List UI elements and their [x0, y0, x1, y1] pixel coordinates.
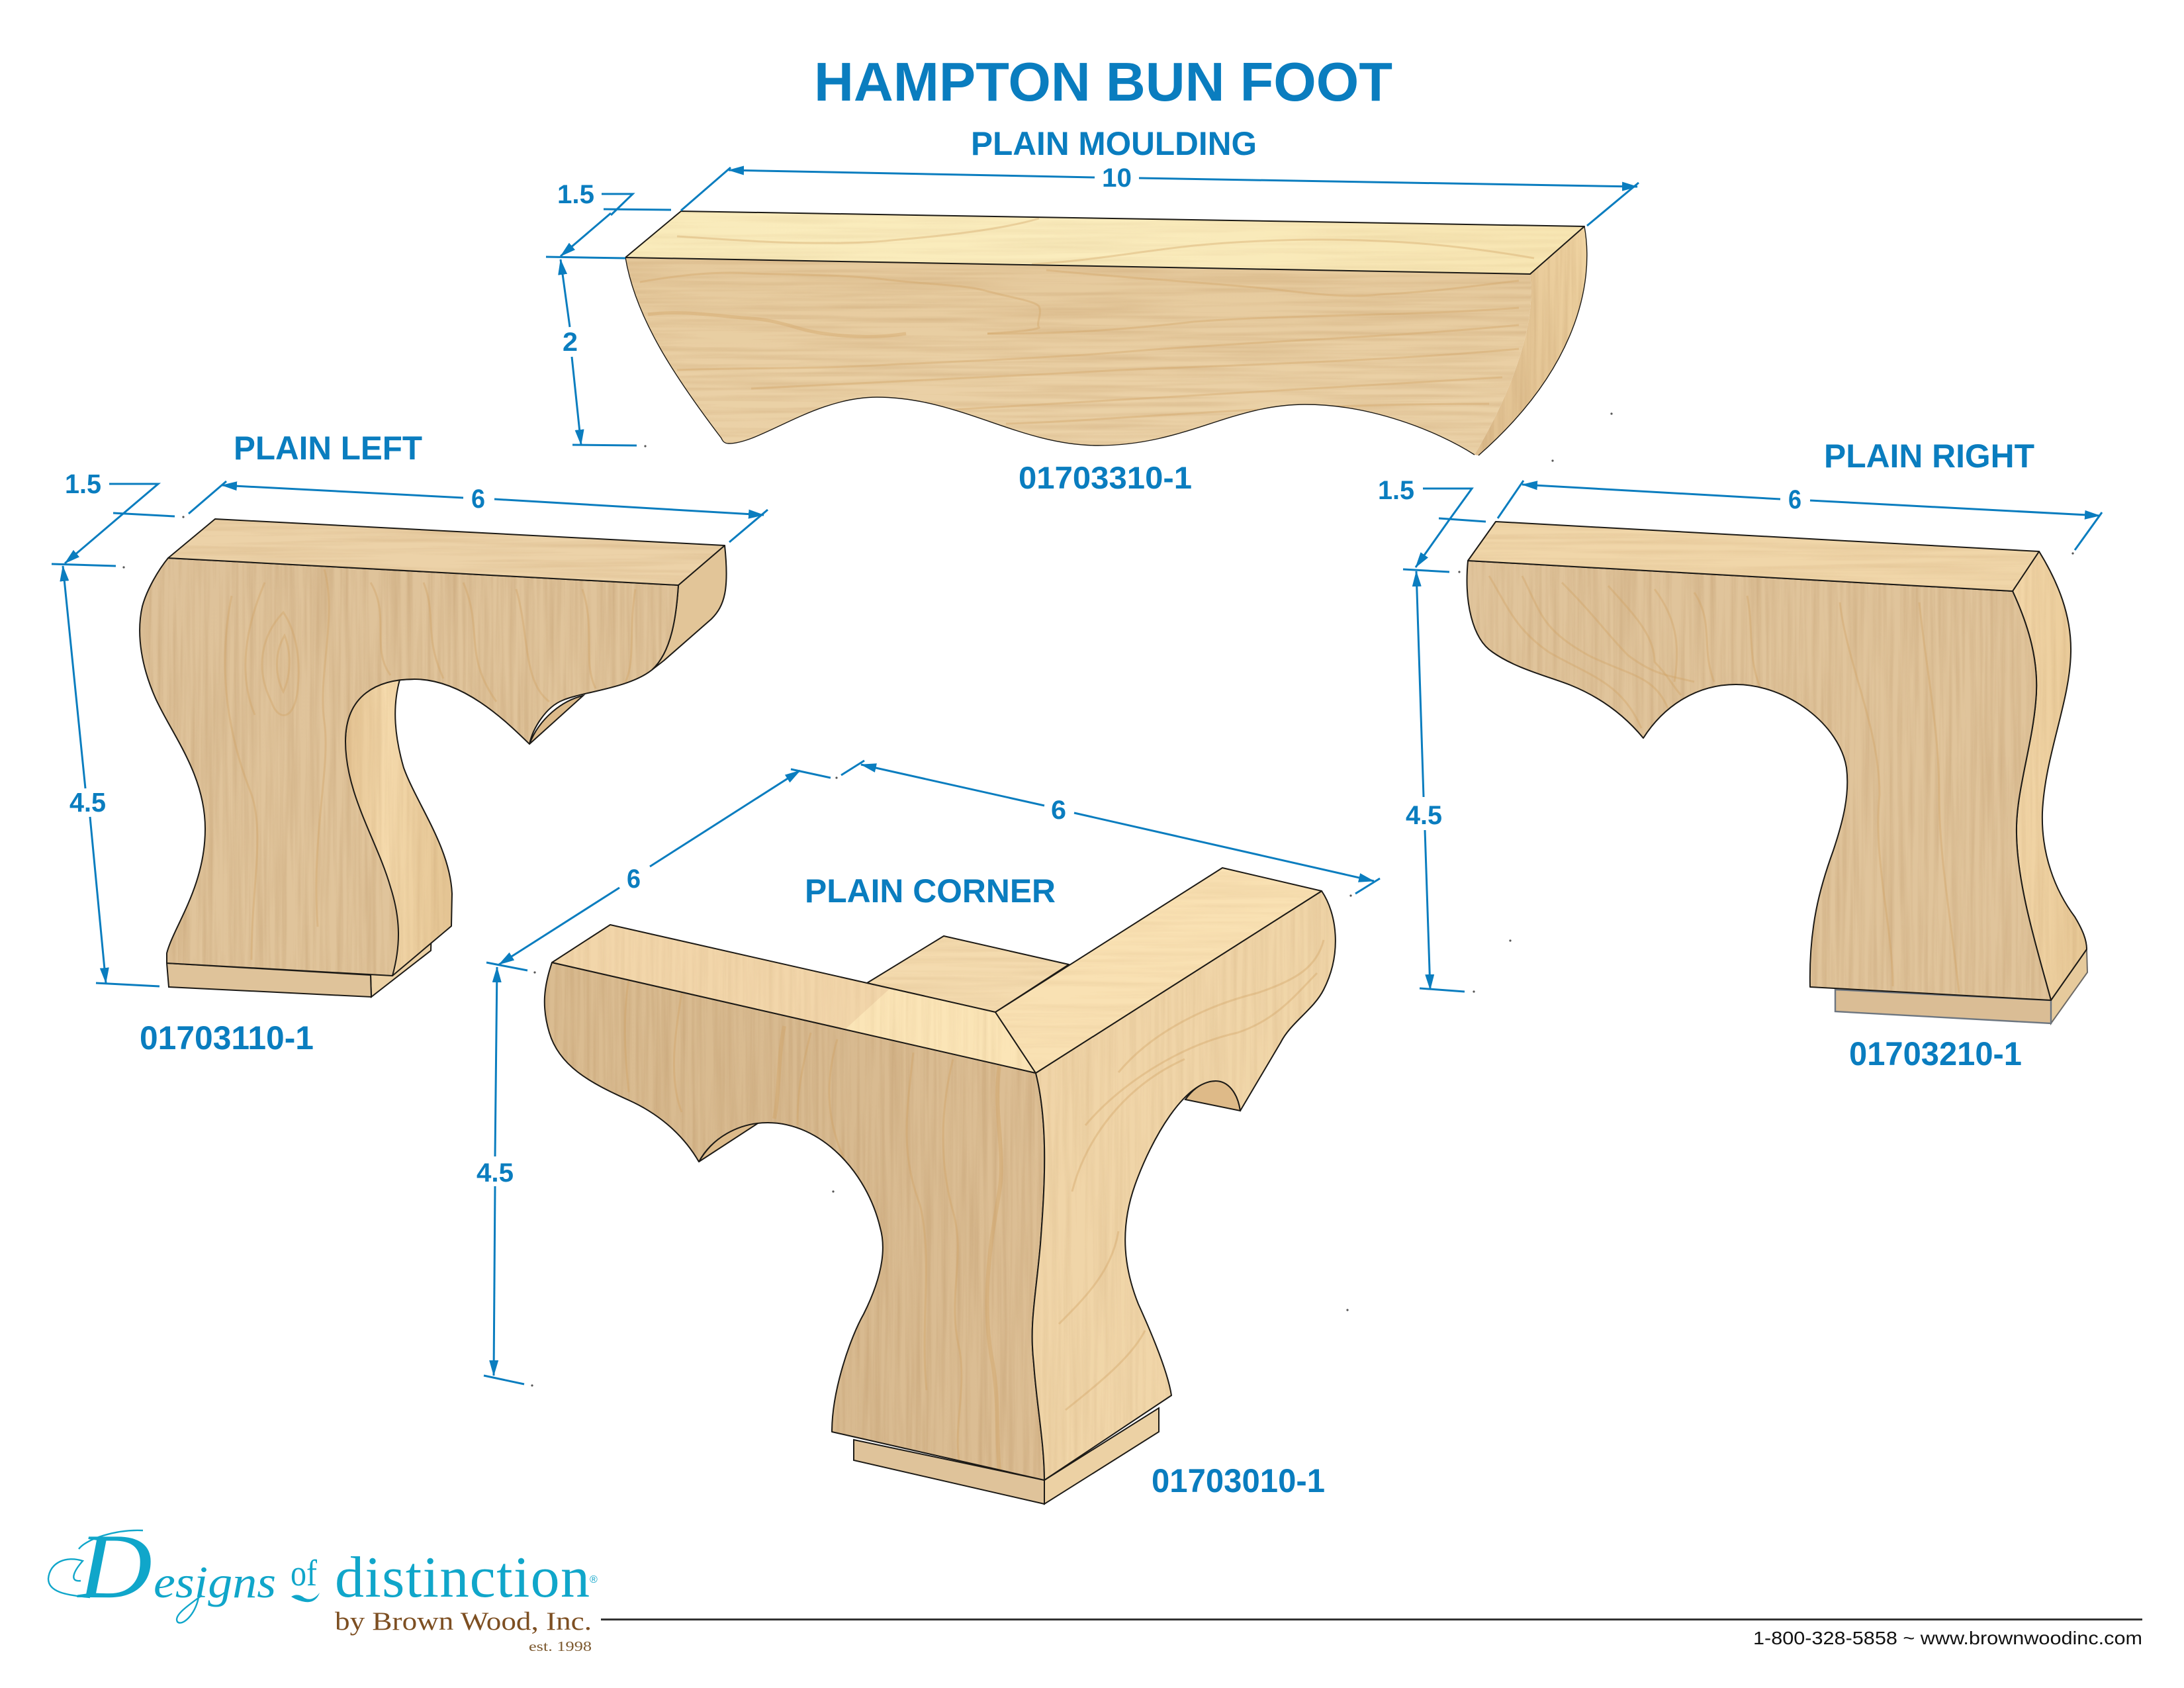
logo word: of: of [291, 1553, 317, 1594]
dimension: 1.5 depth: 1.5 [65, 469, 101, 499]
registered mark: ® [590, 1574, 598, 1585]
left foot: top face [165, 516, 728, 589]
corner foot: right scallop underside [1185, 1081, 1240, 1111]
corner foot: left scallop underside [699, 1123, 758, 1162]
left foot: inner leg [346, 680, 453, 976]
right foot: side face [2012, 549, 2090, 1003]
dimension: 6 width [189, 481, 768, 542]
dimension: 6 right width: 6 [1051, 796, 1066, 825]
logo: Designs of distinction [48, 1515, 598, 1654]
dimension: 6 width: 6 [1788, 485, 1801, 514]
part number: right foot: 01703210-1 [1849, 1035, 2022, 1072]
panel: plain left [52, 430, 768, 1056]
left foot: scallop underside [529, 696, 583, 744]
logo script word: D [77, 1515, 152, 1618]
dimension: 4.5 height [477, 967, 524, 1384]
right foot: front face [1463, 559, 2055, 1003]
dimension: 10 width [681, 164, 1639, 226]
logo established year: est. 1998 [529, 1638, 592, 1654]
heading: plain right: PLAIN RIGHT [1824, 438, 2034, 475]
part number: left foot: 01703110-1 [140, 1019, 314, 1056]
logo word: distinction: distinction [335, 1546, 590, 1610]
part number: corner foot: 01703010-1 [1152, 1462, 1325, 1499]
moulding: top face [622, 209, 1588, 276]
logo swash under of [291, 1593, 320, 1602]
dimension: 6 width: 6 [471, 485, 485, 514]
footer rule [601, 1618, 2142, 1620]
dimension: 2 height [561, 259, 637, 445]
left foot: base [167, 927, 432, 997]
corner foot: left top face [549, 923, 1039, 1076]
dimension: 2 height: 2 [563, 328, 578, 357]
panel: plain corner [477, 761, 1380, 1504]
right foot: base [1835, 949, 2087, 1023]
dimension: 1.5 depth [546, 180, 671, 258]
dimension: 1.5 depth: 1.5 [557, 180, 594, 209]
moulding: side face [1475, 226, 1588, 455]
dimension: 10 width: 10 [1102, 164, 1132, 193]
corner foot: center block top [864, 933, 1072, 1016]
panel: plain moulding [546, 125, 1639, 495]
panel: plain right [1378, 438, 2102, 1072]
dimension: 4.5 height: 4.5 [1406, 801, 1442, 830]
logo tagline: by Brown Wood, Inc. [335, 1607, 592, 1636]
footer contact text: 1-800-328-5858 ~ www.brownwoodinc.com [1753, 1628, 2142, 1648]
dimension: 6 width [1498, 481, 2102, 550]
logo script word: esigns [154, 1557, 276, 1607]
dimension: 4.5 height [63, 566, 159, 986]
part number: moulding: 01703310-1 [1019, 460, 1192, 495]
dimension: 1.5 depth: 1.5 [1378, 476, 1414, 505]
moulding: front face [622, 255, 1535, 455]
logo script word [48, 1515, 276, 1623]
dimension: 1.5 depth [52, 469, 175, 566]
dimension: 6 left width [486, 769, 831, 970]
corner foot: left front face [539, 960, 1049, 1483]
dimension: 4.5 height: 4.5 [477, 1158, 514, 1188]
dimension: 6 right width [841, 761, 1380, 894]
heading: plain moulding: PLAIN MOULDING [971, 125, 1257, 162]
title: HAMPTON BUN FOOT [814, 51, 1392, 113]
corner foot: base [854, 1408, 1159, 1504]
dimension: 6 left width: 6 [627, 865, 641, 894]
dimension: 1.5 depth [1378, 476, 1486, 572]
right foot: top face [1466, 520, 2042, 592]
left foot: side face [652, 545, 727, 670]
heading: plain left: PLAIN LEFT [234, 430, 422, 467]
dimension: 4.5 height [1406, 571, 1465, 992]
corner foot: right top face [993, 867, 1324, 1076]
dimension: 4.5 height: 4.5 [69, 787, 106, 818]
heading: plain corner: PLAIN CORNER [805, 872, 1056, 910]
corner foot: right front face [1029, 890, 1340, 1483]
left foot: front face [136, 556, 682, 980]
